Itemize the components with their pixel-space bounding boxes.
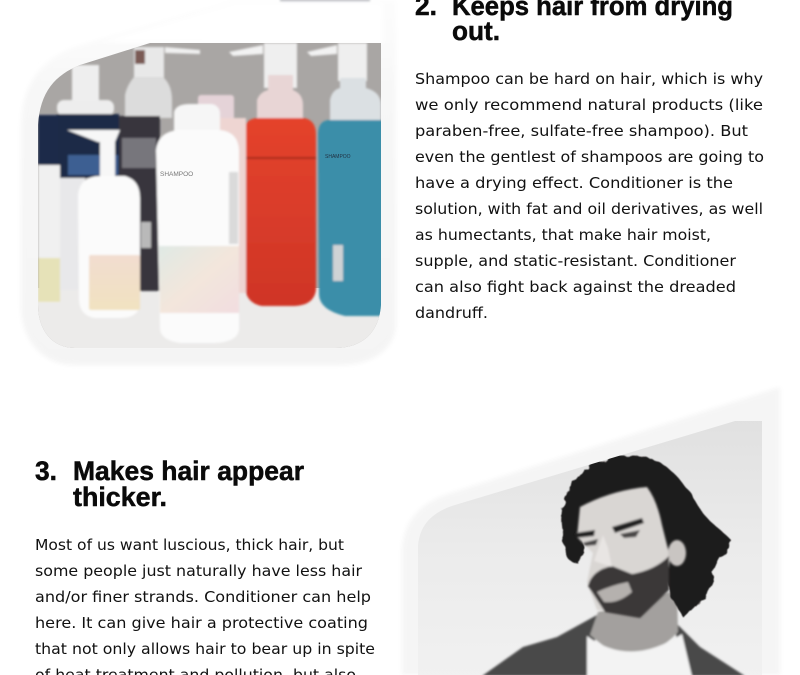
navy bottle	[72, 65, 99, 105]
text block: item 2: solution, with fat and oil derivatives, as well	[415, 200, 763, 218]
nose	[594, 535, 612, 567]
photo: shampoo bottles in rounded frame	[21, 0, 396, 365]
text block: item 3: Most of us want luscious, thick hair, but	[35, 536, 344, 554]
spout behind	[165, 47, 200, 54]
text block: item 3: that not only allows hair to bear up in spite	[35, 640, 375, 658]
heading: item 3: Makes hair appear	[73, 456, 304, 486]
dark bottle	[134, 47, 164, 79]
t-shirt	[587, 634, 692, 675]
text block: item 2: even the gentlest of shampoos are going to	[415, 148, 764, 166]
beard	[588, 556, 669, 618]
white band at top of frame	[100, 3, 383, 43]
text block: item 3: and/or finer strands. Conditioner can help	[35, 588, 371, 606]
text block: item 2: dandruff.	[415, 304, 488, 322]
brows and eyes	[575, 518, 644, 538]
teal bottle	[338, 43, 367, 81]
photo: man with thick hair in frame	[402, 387, 780, 675]
bottles picture	[30, 40, 390, 360]
text block: item 2: have a drying effect. Conditioner is the	[415, 174, 733, 192]
text block: item 2: we only recommend natural products (like	[415, 96, 763, 114]
text block: item 3: some people just naturally have less hair	[35, 562, 363, 580]
text block: item 2: Shampoo can be hard on hair, which is why	[415, 70, 763, 88]
bottles picture: SHAMPOO	[325, 154, 351, 160]
heading: item 2: out.	[452, 16, 500, 46]
text block: item 2	[415, 70, 764, 322]
heading: item 3: 3.	[35, 456, 57, 486]
central white shampoo bottle	[174, 104, 220, 135]
text block: item 2: supple, and static-resistant. Conditioner	[415, 252, 737, 270]
portrait picture	[410, 415, 770, 675]
text block: item 2: as humectants, that make hair moist,	[415, 226, 711, 244]
neck	[590, 590, 678, 656]
image sliver above frame	[280, 0, 370, 3]
text block: item 3: here. It can give hair a protective coating	[35, 614, 368, 632]
small white bottle	[67, 130, 120, 178]
bottle label text: SHAMPOO	[160, 171, 193, 178]
frame: light panel	[402, 387, 780, 675]
heading: item 3	[35, 456, 304, 512]
ear	[668, 540, 686, 566]
jacket	[482, 615, 745, 675]
heading: item 2	[415, 0, 733, 46]
text block: item 2: can also fight back against the dreaded	[415, 278, 736, 296]
text block: item 3	[35, 536, 375, 675]
frame: light rounded panel	[21, 0, 396, 365]
text block: item 2: paraben-free, sulfate-free shampoo). But	[415, 122, 748, 140]
face	[577, 487, 670, 617]
hair	[561, 455, 731, 618]
red bottle	[264, 43, 297, 88]
far-left bottle	[38, 115, 58, 165]
heading: item 3: thicker.	[73, 482, 167, 512]
lip area	[597, 582, 632, 602]
pink bottle behind	[198, 95, 234, 120]
